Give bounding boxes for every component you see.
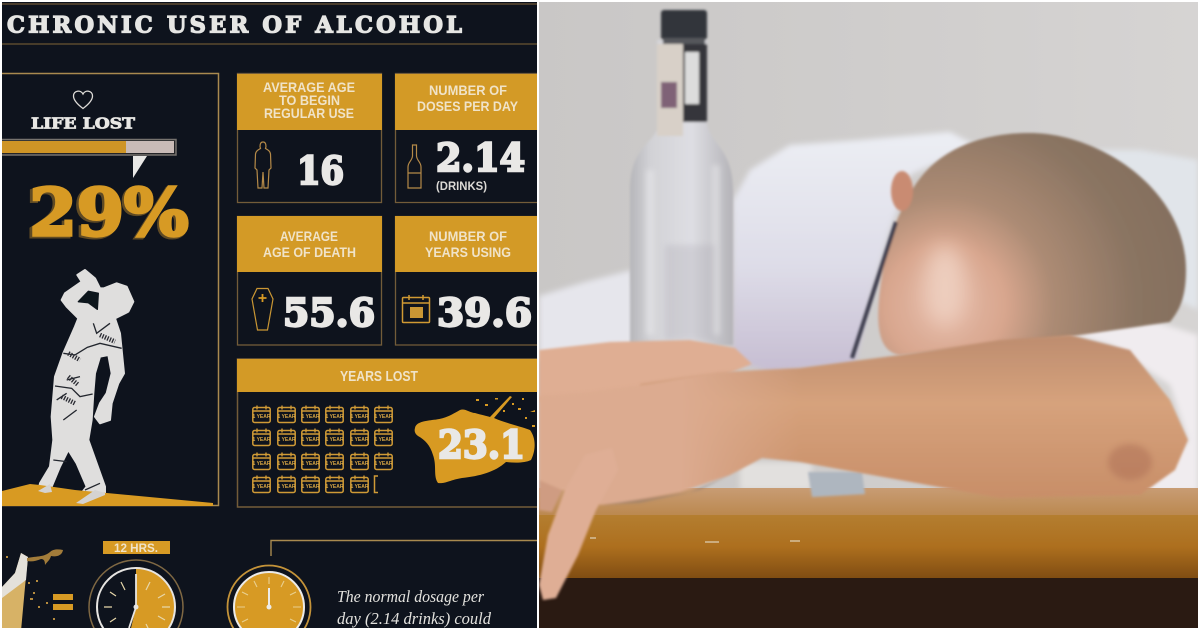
label: AVERAGE AGE [263, 79, 355, 95]
calendar grid: 23.1 years: 1 YEAR [278, 461, 296, 467]
shot glass [808, 472, 865, 497]
calendar grid: 23.1 years: 1 YEAR [351, 461, 369, 467]
label [263, 82, 355, 118]
head [852, 133, 1186, 358]
calendar grid: 23.1 years: 1 YEAR [302, 437, 320, 443]
panel: doses per day [395, 74, 537, 202]
calendar grid: 23.1 years: 1 YEAR [302, 484, 320, 490]
calendar grid: 23.1 years: 1 YEAR [351, 414, 369, 420]
stat: 29%: 29% [30, 175, 188, 251]
clock: full dial [228, 566, 310, 628]
wall [539, 2, 1198, 502]
text block: dosage note [337, 587, 491, 628]
label [418, 86, 518, 111]
panel: average age of death [237, 216, 382, 345]
panel: years using [395, 216, 537, 345]
icon: equals sign [53, 594, 73, 610]
value: 55.6: 55.6 [283, 290, 375, 335]
ink splat [415, 396, 535, 483]
unit: drinks: (DRINKS) [436, 179, 487, 193]
table [539, 488, 1198, 628]
stat: 29% [30, 185, 189, 240]
rear hand [539, 340, 752, 402]
text block: dosage note: The normal dosage per [337, 587, 484, 606]
value: 2.14: 2.14 [436, 135, 525, 180]
forearm and front hand [539, 335, 1188, 600]
panel: years lost [237, 359, 537, 507]
figure: man drinking from a bottle [38, 270, 133, 504]
calendar grid: 23.1 years: 1 YEAR [375, 414, 393, 420]
clock: half-day [89, 560, 183, 628]
label: 12 hrs: 12 HRS. [114, 541, 158, 555]
calendar grid: 23.1 years: 1 YEAR [253, 461, 271, 467]
photo: man passed out at table beside empty bottle [539, 2, 1198, 628]
label: TO BEGIN [279, 92, 340, 108]
label: REGULAR USE [264, 105, 354, 121]
label: 12 hrs [103, 541, 170, 555]
calendar grid: 23.1 years: 1 YEAR [302, 414, 320, 420]
heading: life lost: LIFE LOST [31, 114, 136, 132]
label [263, 232, 356, 257]
calendar grid: 23.1 years: 1 YEAR [253, 484, 271, 490]
icon: spilling bottle [2, 549, 63, 628]
calendar grid: 23.1 years: 1 YEAR [326, 414, 344, 420]
label: NUMBER OF [429, 82, 507, 98]
pointer [133, 156, 147, 178]
calendar grid: 23.1 years [253, 406, 393, 492]
icon: bottle [408, 145, 421, 188]
panel: life lost [1, 74, 218, 506]
calendar grid: 23.1 years: 1 YEAR [351, 484, 369, 490]
shirt [539, 132, 1198, 492]
progress bar [1, 140, 176, 155]
stat: 29%: 29% [27, 176, 187, 252]
label: DOSES PER DAY [417, 98, 519, 114]
panel: average age to begin [237, 74, 382, 202]
calendar grid: 23.1 years: 1 YEAR [375, 437, 393, 443]
panel: infographic [1, 2, 537, 628]
calendar grid: 23.1 years: 1 YEAR [278, 414, 296, 420]
heading: years lost: YEARS LOST [340, 369, 418, 385]
label: YEARS USING [425, 244, 511, 260]
calendar grid: 23.1 years: 1 YEAR [326, 461, 344, 467]
icon: coffin [252, 288, 273, 330]
figure: feet over ground [38, 484, 105, 504]
title: CHRONIC USER OF ALCOHOL [7, 12, 462, 38]
icon: calendar [402, 295, 430, 322]
calendar grid: 23.1 years: 1 YEAR [253, 414, 271, 420]
label: AGE OF DEATH [263, 244, 356, 260]
calendar grid: 23.1 years: 1 YEAR [326, 437, 344, 443]
text block: dosage note: day (2.14 drinks) could [337, 609, 491, 628]
label: AVERAGE [280, 228, 338, 244]
value: 16: 16 [297, 148, 344, 193]
calendar grid: 23.1 years: 1 YEAR [302, 461, 320, 467]
icon: person [255, 142, 271, 188]
icon: heart [74, 91, 92, 108]
value: 39.6: 39.6 [437, 290, 532, 335]
label: NUMBER OF [429, 228, 507, 244]
calendar grid: 23.1 years: 1 YEAR [278, 437, 296, 443]
ground wedge [2, 484, 213, 506]
calendar grid: 23.1 years: 1 YEAR [253, 437, 271, 443]
calendar grid: 23.1 years: 1 YEAR [351, 437, 369, 443]
calendar grid: 23.1 years: 1 YEAR [375, 461, 393, 467]
calendar grid: 23.1 years: 1 YEAR [278, 484, 296, 490]
value: 23.1: 23.1 [438, 422, 525, 467]
callout bracket [271, 540, 537, 556]
bottle [630, 10, 733, 345]
label [425, 232, 510, 257]
calendar grid: 23.1 years: 1 YEAR [326, 484, 344, 490]
